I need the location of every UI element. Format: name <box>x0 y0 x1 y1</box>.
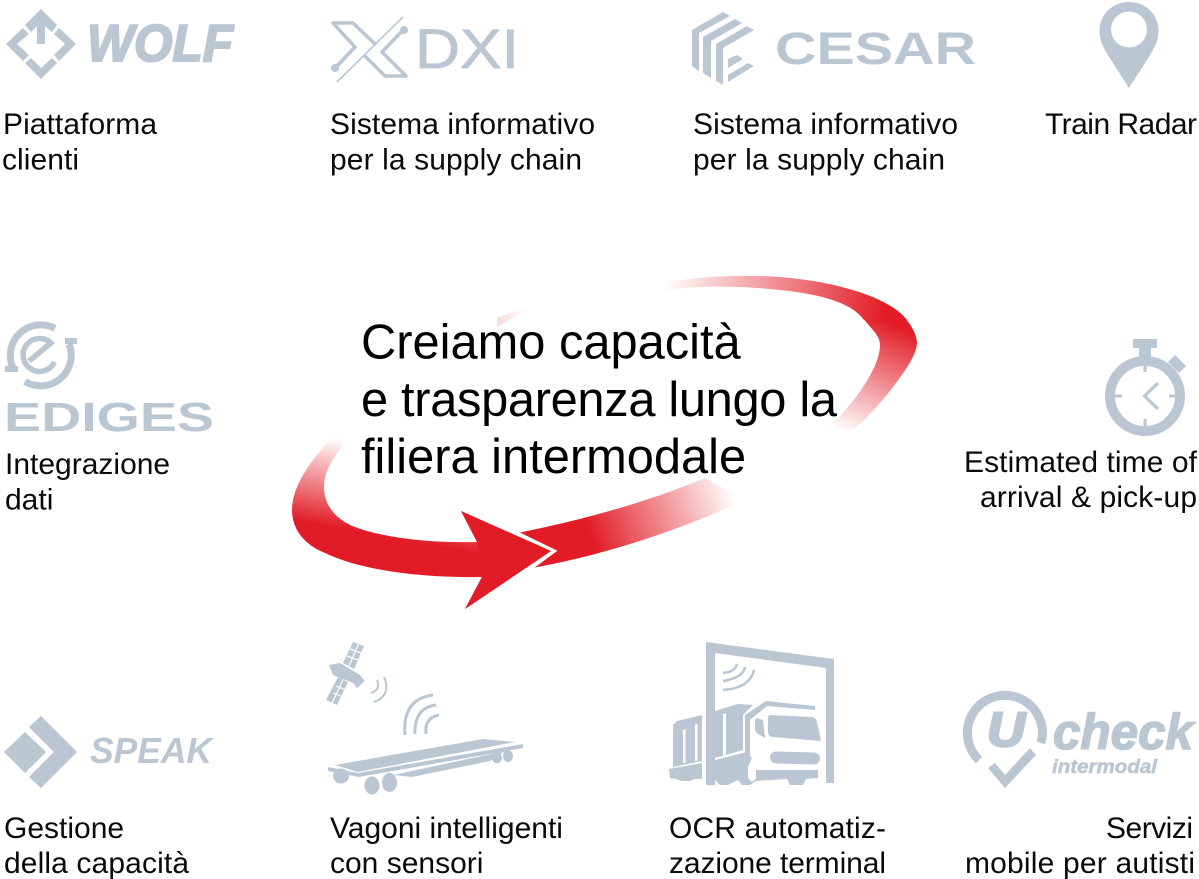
panel: U check <box>965 695 1195 879</box>
label: OCR automatizzazione terminal <box>669 812 886 879</box>
label: Sistema informativo per la supply chain <box>693 108 958 176</box>
logo wordmark: check: check <box>1053 704 1195 760</box>
icon: flat wagon <box>328 739 523 794</box>
label: Gestione della capacità: Gestione <box>4 812 124 845</box>
panel: Train Radar <box>1045 2 1197 141</box>
label: Integrazione dati: dati <box>5 484 53 516</box>
label: Integrazione dati <box>5 448 170 516</box>
logo wordmark: intermodal: intermodal <box>1052 757 1158 778</box>
heading: Creiamo capacità e trasparenza lungo la filiera intermodale: filiera intermodale <box>361 430 746 484</box>
label: OCR automatizzazione terminal: OCR automatiz- <box>669 812 886 845</box>
label: Sistema informativo per la supply chain: per la supply chain <box>330 144 582 176</box>
label: Servizi mobile per autisti: Servizi <box>1106 812 1193 845</box>
logo wordmark: SPEAK: SPEAK <box>90 730 215 771</box>
icon: location pin <box>1100 2 1158 88</box>
logo wordmark: DXI: DXI <box>415 17 519 80</box>
label: Sistema informativo per la supply chain: Sistema informativo <box>693 108 958 141</box>
icon: WOLF diamond logo <box>6 9 76 79</box>
panel: SPEAK <box>4 716 215 879</box>
label: Sistema informativo per la supply chain: Sistema informativo <box>330 108 595 141</box>
label: Piattaforma clienti: Piattaforma <box>3 108 157 141</box>
logo wordmark: EDIGES: EDIGES <box>4 394 214 440</box>
icon: satellite <box>326 642 386 705</box>
label: Vagoni intelligenti con sensori: Vagoni intelligenti <box>330 812 563 845</box>
logo wordmark: WOLF: WOLF <box>87 15 234 73</box>
panel: central swoosh and headline <box>292 276 917 609</box>
icon: CESAR hexagon logo <box>692 12 754 85</box>
icon: OCR gate with truck <box>669 642 834 785</box>
panel: smart wagons <box>326 642 563 879</box>
arrow: red loop swoosh <box>292 276 917 609</box>
label: Vagoni intelligenti con sensori <box>330 812 563 879</box>
label: Servizi mobile per autisti <box>965 812 1195 879</box>
panel: CESAR <box>692 12 976 176</box>
logo wordmark: CESAR: CESAR <box>775 23 976 74</box>
label: Piattaforma clienti <box>2 108 157 176</box>
icon: U check pin logo: U <box>987 704 1026 757</box>
heading: Creiamo capacità e trasparenza lungo la filiera intermodale: e trasparenza lungo la <box>361 373 838 427</box>
icon: SPEAK diamond logo <box>4 716 77 788</box>
panel: OCR terminal <box>669 642 886 879</box>
icon: signal waves <box>405 695 439 735</box>
heading: Creiamo capacità e trasparenza lungo la filiera intermodale: Creiamo capacità <box>361 316 742 370</box>
label: Train Radar: Train Radar <box>1045 108 1197 141</box>
panel: DXI <box>330 17 595 176</box>
label: Estimated time of arrival & pick-up <box>964 446 1198 514</box>
label: Piattaforma clienti: clienti <box>2 144 79 176</box>
label: Estimated time of arrival & pick-up: arrival & pick-up <box>980 481 1197 514</box>
panel: Estimated time of arrival <box>964 339 1198 514</box>
label: Sistema informativo per la supply chain: per la supply chain <box>693 144 945 176</box>
panel: EDIGES <box>4 325 214 516</box>
label: Gestione della capacità <box>4 812 189 879</box>
heading: Creiamo capacità e trasparenza lungo la filiera intermodale <box>361 316 838 484</box>
icon: stopwatch <box>1110 339 1186 431</box>
icon: DXI crossed circuit logo <box>331 17 408 82</box>
label: Sistema informativo per la supply chain <box>330 108 595 176</box>
panel: WOLF <box>2 9 234 176</box>
icon: U check pin logo <box>967 695 1042 788</box>
label: Estimated time of arrival & pick-up: Estimated time of <box>964 446 1198 479</box>
label: Integrazione dati: Integrazione <box>5 448 170 481</box>
icon: EDIGES e logo <box>5 325 77 386</box>
